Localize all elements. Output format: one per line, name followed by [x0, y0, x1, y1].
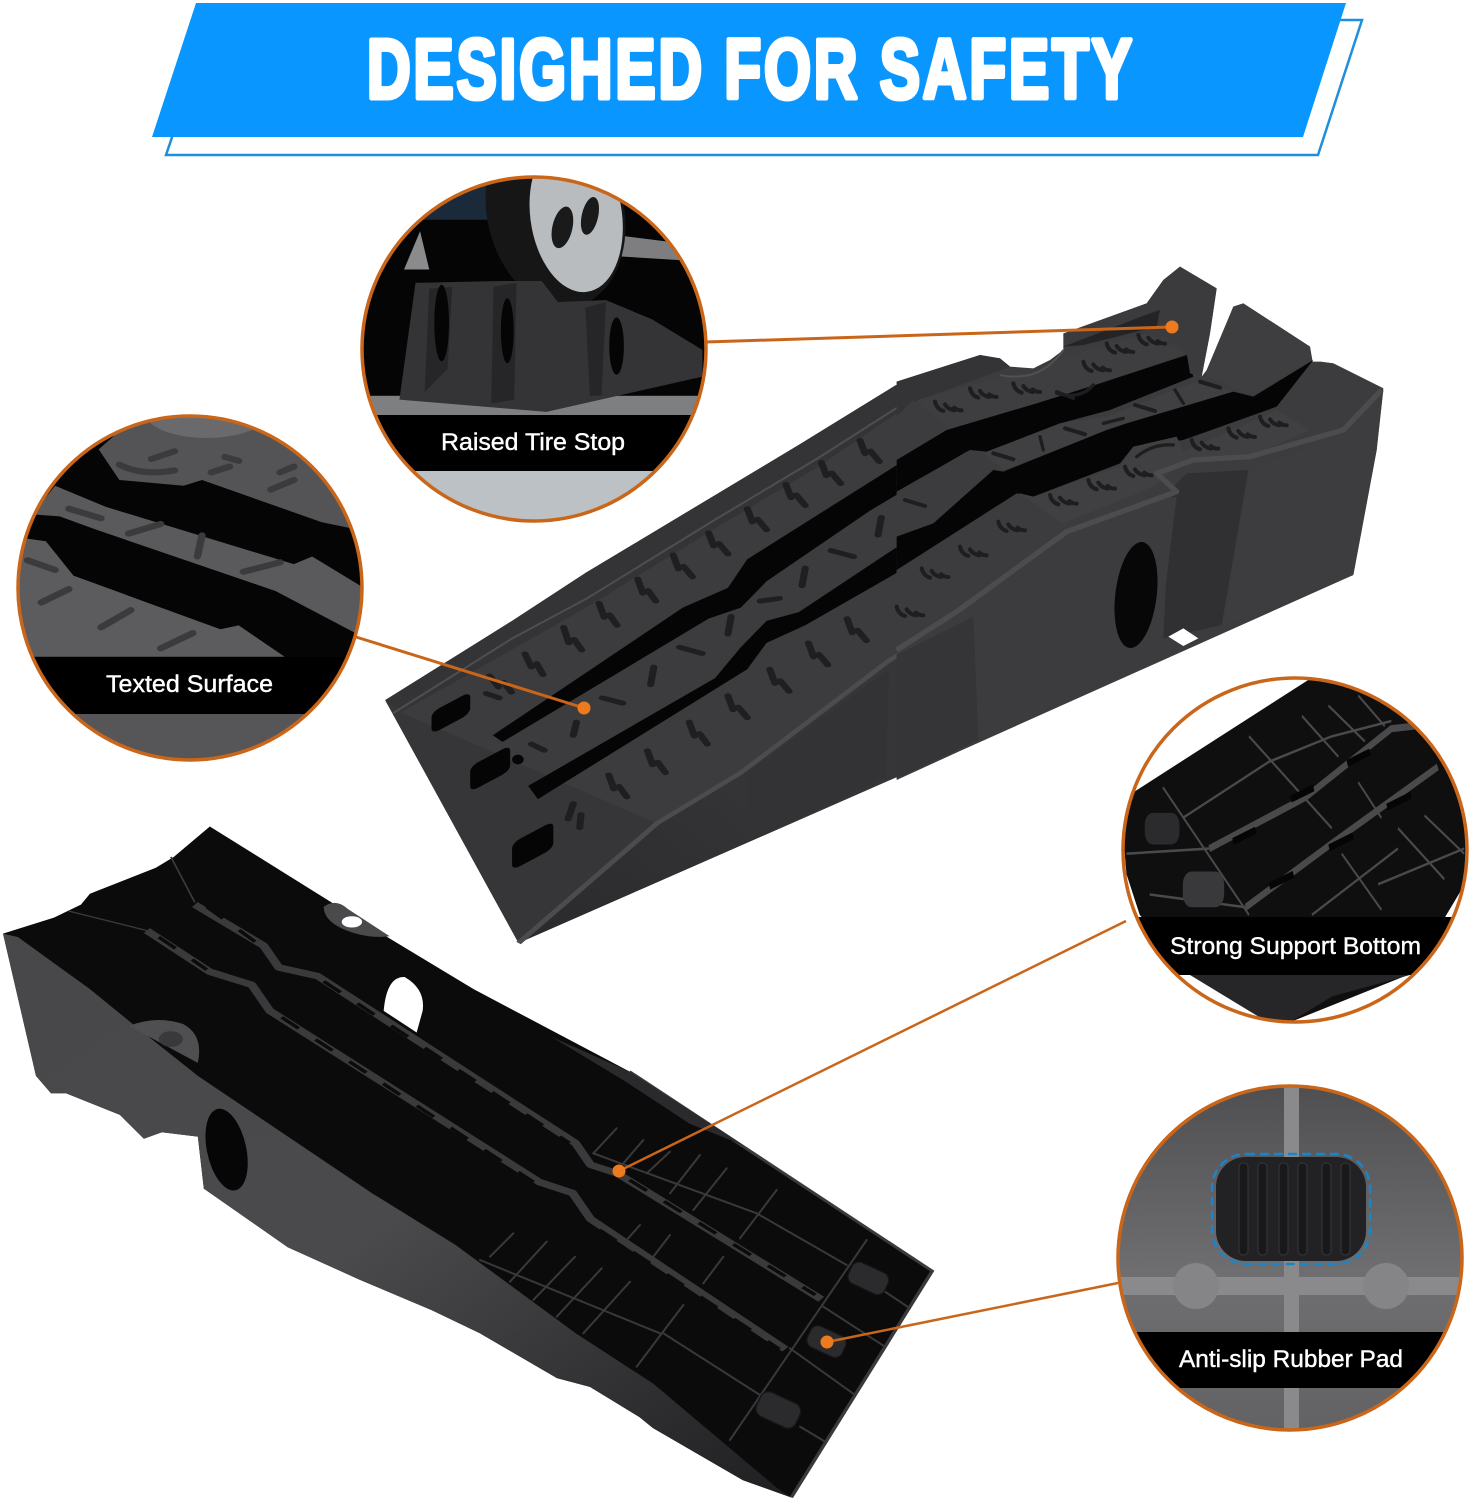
tire stop 1 — [1063, 267, 1217, 377]
channel 1 — [493, 460, 905, 742]
label band — [74, 713, 306, 714]
side hole — [1109, 540, 1163, 650]
upper lip — [552, 1037, 743, 1145]
lower ramp, underside view — [3, 827, 932, 1497]
end face — [1223, 390, 1383, 627]
side wall — [3, 934, 791, 1497]
ridge — [897, 390, 1382, 650]
panel: raised tire stop — [360, 175, 708, 523]
tire stop 3 — [1277, 362, 1383, 430]
label: Raised Tire Stop — [441, 429, 625, 456]
right body outline — [897, 267, 1383, 780]
plank 2 — [983, 380, 1233, 470]
pointer line: anti-slip rubber pad — [820, 1283, 1118, 1348]
upper ramp, top view — [385, 267, 1383, 943]
channel 1 — [897, 355, 1193, 492]
label band — [377, 415, 691, 471]
label: Texted Surface — [106, 671, 273, 698]
panel: strong support bottom — [1120, 675, 1471, 1025]
panel: textured surface — [15, 392, 365, 767]
mounting tabs — [129, 1020, 199, 1063]
through hole — [384, 977, 423, 1033]
label: Strong Support Bottom — [1170, 933, 1421, 960]
tread marks — [486, 440, 881, 828]
recess — [1163, 470, 1248, 638]
plank 1 — [917, 333, 1190, 430]
label band — [1138, 917, 1452, 975]
internal ribs — [69, 857, 821, 1349]
pointer line: textured surface — [356, 637, 590, 714]
cross ribs and pads — [480, 1128, 910, 1442]
front plate holes — [432, 692, 553, 870]
rubber pad — [1212, 1154, 1370, 1264]
tire stop 2 — [1207, 303, 1312, 395]
side hole — [199, 1107, 254, 1192]
label: Anti-slip Rubber Pad — [1179, 1346, 1403, 1373]
top lip — [897, 355, 1010, 417]
pointer line: raised tire stop — [706, 320, 1178, 342]
title banner — [152, 3, 1362, 155]
panel: anti-slip rubber pad — [1115, 1084, 1465, 1434]
channel 2 — [897, 360, 1313, 570]
tread marks — [935, 402, 962, 411]
pointer line: strong support bottom — [612, 921, 1126, 1178]
side door panel — [973, 497, 1177, 740]
channel 2 — [528, 542, 905, 799]
plank 3 — [897, 410, 1310, 573]
title text: DESIGHED FOR SAFETY — [367, 22, 1135, 116]
label band — [1136, 1332, 1444, 1388]
